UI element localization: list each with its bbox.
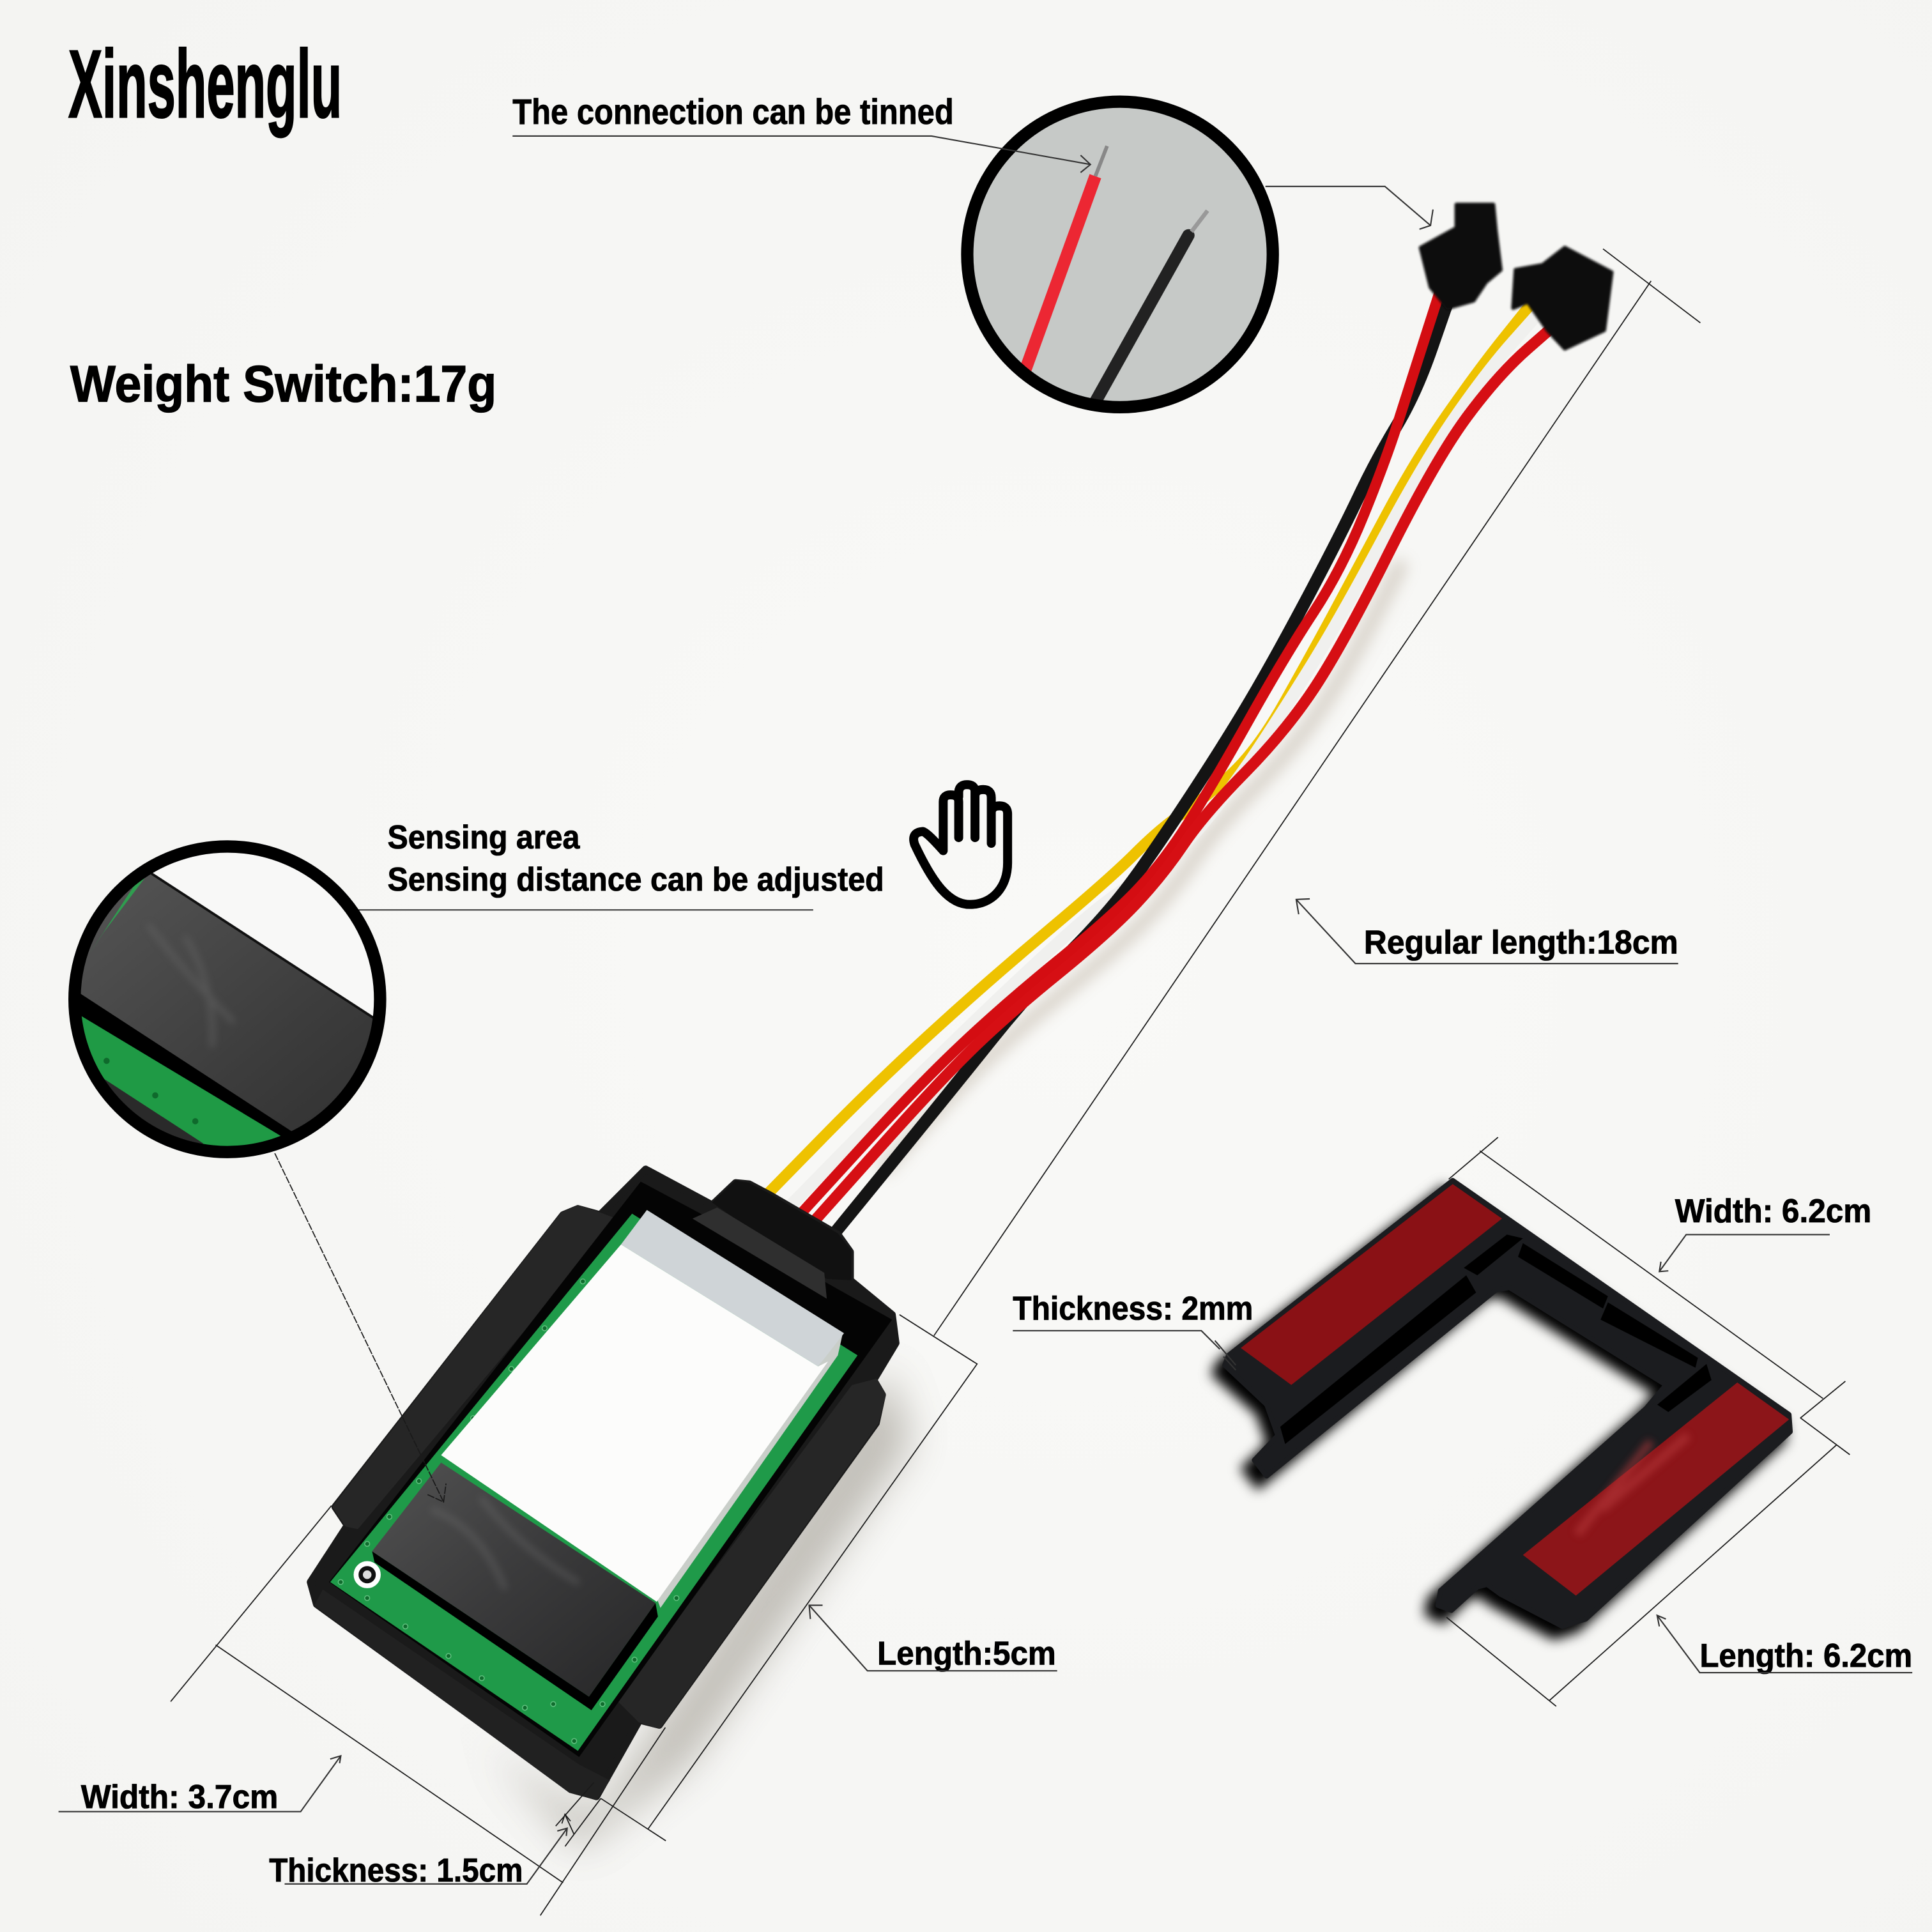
- wire harness: [767, 286, 1558, 1232]
- right ear: [618, 1380, 885, 1728]
- panel side: [657, 1333, 843, 1608]
- leader: circle to connector: [1266, 187, 1433, 229]
- black wire: [1089, 235, 1188, 413]
- pads: [103, 1058, 198, 1124]
- zoom circle: tinned wire ends: [967, 102, 1273, 413]
- sensor sheen: [431, 1497, 579, 1590]
- thickness label: [269, 1828, 567, 1889]
- pcb dots: [338, 1279, 679, 1744]
- bracket width label: [1659, 1193, 1871, 1271]
- yellow wire: [767, 308, 1528, 1195]
- pcb: [330, 1214, 857, 1751]
- black edge: [80, 994, 291, 1136]
- thickness label: Thickness: 1.5cm: [269, 1852, 523, 1889]
- upper green sliver: [89, 877, 146, 955]
- regular length dimension: [934, 249, 1700, 1336]
- bracket frame: [1225, 1181, 1790, 1627]
- dark sensor band: [80, 874, 373, 1131]
- pcb green: [82, 1016, 281, 1146]
- lower dark corner: [104, 1078, 203, 1144]
- ring center: [363, 1570, 371, 1579]
- band sheen: [148, 924, 234, 1047]
- housing body: [310, 1169, 896, 1797]
- bracket length label: [1657, 1615, 1912, 1675]
- adhesive strip 1: [1241, 1184, 1502, 1385]
- bracket length label: Length: 6.2cm: [1699, 1637, 1912, 1675]
- strain relief: [712, 1181, 852, 1280]
- lower face highlight: [314, 1590, 610, 1800]
- module width dimension: [171, 1506, 563, 1883]
- icon: hand: [914, 785, 1008, 905]
- panel edge line: [151, 873, 373, 1018]
- cavity: [329, 1182, 892, 1757]
- sensing label: Sensing distance can be adjusted: [388, 861, 884, 898]
- adhesive bracket: [1225, 1181, 1790, 1627]
- gasket: [693, 1208, 827, 1299]
- strip sheen: [1577, 1436, 1688, 1534]
- length label: [809, 1606, 1057, 1673]
- callout: connection can be tinned: [512, 91, 1091, 172]
- panel black underside: [372, 1551, 658, 1710]
- callout: connection can be tinned: The connection can be tinned: [512, 91, 954, 132]
- width label: Width: 3.7cm: [81, 1779, 278, 1816]
- wire shadows: [885, 567, 1400, 1167]
- frame slots: [1280, 1234, 1712, 1444]
- panel grey: [621, 1210, 844, 1367]
- red wire tin: [1095, 146, 1107, 176]
- red wire 1: [801, 286, 1441, 1214]
- module length dimension: [601, 1315, 977, 1841]
- red wire: [1016, 176, 1095, 394]
- black wire tin: [1192, 211, 1208, 232]
- title: Xinshenglu: [68, 30, 342, 137]
- bracket thickness label: Thickness: 2mm: [1013, 1290, 1253, 1327]
- left ear: [334, 1206, 616, 1528]
- module shadow: [370, 1368, 912, 1848]
- module thickness dimension: [540, 1728, 665, 1915]
- bracket width label: Width: 6.2cm: [1675, 1193, 1871, 1230]
- bracket shadow: [1214, 1188, 1784, 1637]
- width label: [59, 1756, 341, 1816]
- weight text: Weight Switch:17g: [70, 356, 496, 413]
- regular length label: [1296, 899, 1678, 963]
- connector 1: [1421, 204, 1501, 308]
- panel dark sensor: [372, 1462, 656, 1697]
- connector 2: [1513, 248, 1612, 349]
- zoom circle: sensing area: [68, 840, 387, 1158]
- bracket thickness label: [1013, 1290, 1253, 1370]
- red wire 2: [813, 323, 1558, 1222]
- white wire: [788, 314, 1538, 1208]
- bracket length dimension: [1446, 1418, 1850, 1706]
- sensing label: [358, 819, 884, 910]
- sensor module: [310, 1169, 896, 1800]
- sensing leader: [275, 1153, 446, 1502]
- regular length label: Regular length:18cm: [1364, 924, 1678, 962]
- sensing label: Sensing area: [388, 819, 580, 856]
- panel white: [441, 1245, 828, 1602]
- bracket width dimension: [1449, 1137, 1845, 1418]
- black wire: [836, 302, 1448, 1232]
- length label: Length:5cm: [877, 1635, 1056, 1672]
- adhesive strip 2: [1523, 1383, 1789, 1596]
- ring mark: [356, 1563, 378, 1586]
